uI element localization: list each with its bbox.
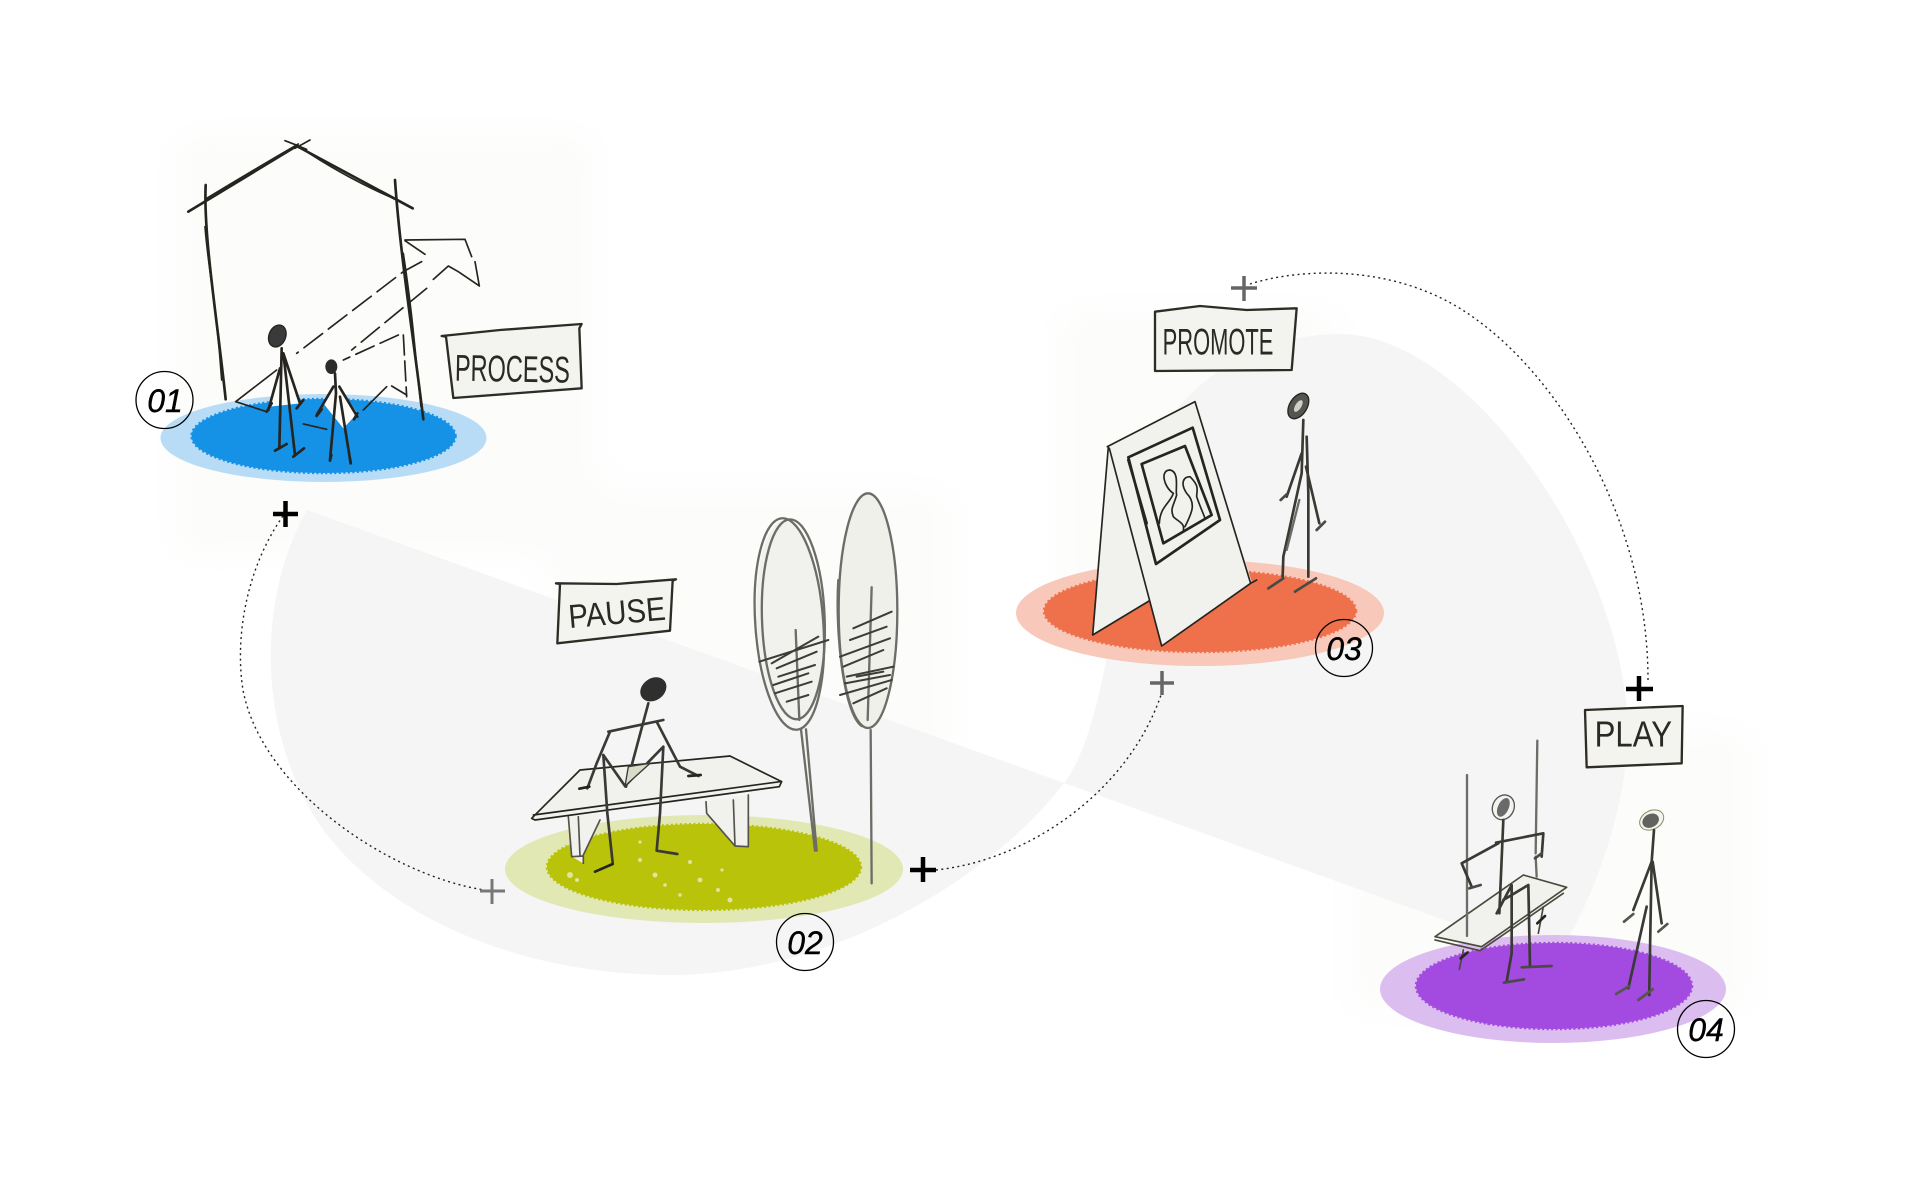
dotted connector: 03 to 04 xyxy=(1250,273,1648,680)
plus marker before 02 xyxy=(480,879,505,904)
seesaw xyxy=(1435,741,1567,969)
number badge 03: 03 xyxy=(1326,631,1362,667)
number badge 01 xyxy=(136,372,193,428)
standing figure xyxy=(1268,390,1325,592)
child on seesaw xyxy=(1462,791,1552,983)
adult figure xyxy=(265,322,304,457)
paper texture patches behind the sketches xyxy=(175,135,1750,1010)
dotted connector: 02 to 03 xyxy=(936,692,1162,870)
sketch: bench, seated figure, two trees xyxy=(532,493,897,883)
house outline xyxy=(188,140,423,419)
standing figure xyxy=(1616,806,1667,1000)
scene 03: promote xyxy=(1016,306,1384,676)
child figure xyxy=(317,359,357,463)
ground disc: blue xyxy=(160,394,486,482)
dotted connector: 01 to 02 xyxy=(240,516,484,890)
sketch: seesaw bench and two figures xyxy=(1435,741,1667,1000)
number badge 03 xyxy=(1316,620,1372,676)
label: process: PROCESS xyxy=(455,347,570,391)
number badge 04 xyxy=(1678,1000,1734,1058)
dashed flag xyxy=(236,239,479,429)
number badge 04: 04 xyxy=(1688,1012,1724,1048)
number badge 02 xyxy=(776,914,834,970)
label: pause: PAUSE xyxy=(567,591,667,636)
white speckles on the green disc xyxy=(567,840,732,902)
plus marker after 03 xyxy=(1231,276,1257,301)
label: process xyxy=(442,324,582,398)
grey infinity-shaped background swoosh xyxy=(271,334,1628,975)
bench xyxy=(532,755,782,863)
A-frame poster xyxy=(1093,402,1257,646)
label: promote xyxy=(1155,306,1297,371)
ground disc: orange xyxy=(1016,560,1384,666)
ground disc: purple xyxy=(1380,935,1726,1043)
label: promote: PROMOTE xyxy=(1163,320,1273,362)
scene 04: play xyxy=(1380,706,1734,1058)
seated figure xyxy=(579,672,701,872)
plus marker before 04 xyxy=(1626,676,1653,701)
plus marker after 02 xyxy=(910,857,936,882)
tree 1 xyxy=(748,516,831,851)
scene 01: process xyxy=(136,140,582,482)
number badge 02: 02 xyxy=(787,925,823,961)
tree 2 xyxy=(838,493,897,883)
plus marker before 03 xyxy=(1150,671,1174,695)
sketch: A-frame poster and figure xyxy=(1093,390,1325,646)
sketch: house, flag and two figures xyxy=(188,140,479,463)
plus marker after 01 xyxy=(273,501,298,527)
scene 02: pause xyxy=(505,493,903,970)
label: play: PLAY xyxy=(1595,714,1672,755)
label: pause xyxy=(556,579,676,643)
label: play xyxy=(1585,706,1683,767)
number badge 01: 01 xyxy=(147,383,183,419)
ground disc: green xyxy=(505,815,903,923)
